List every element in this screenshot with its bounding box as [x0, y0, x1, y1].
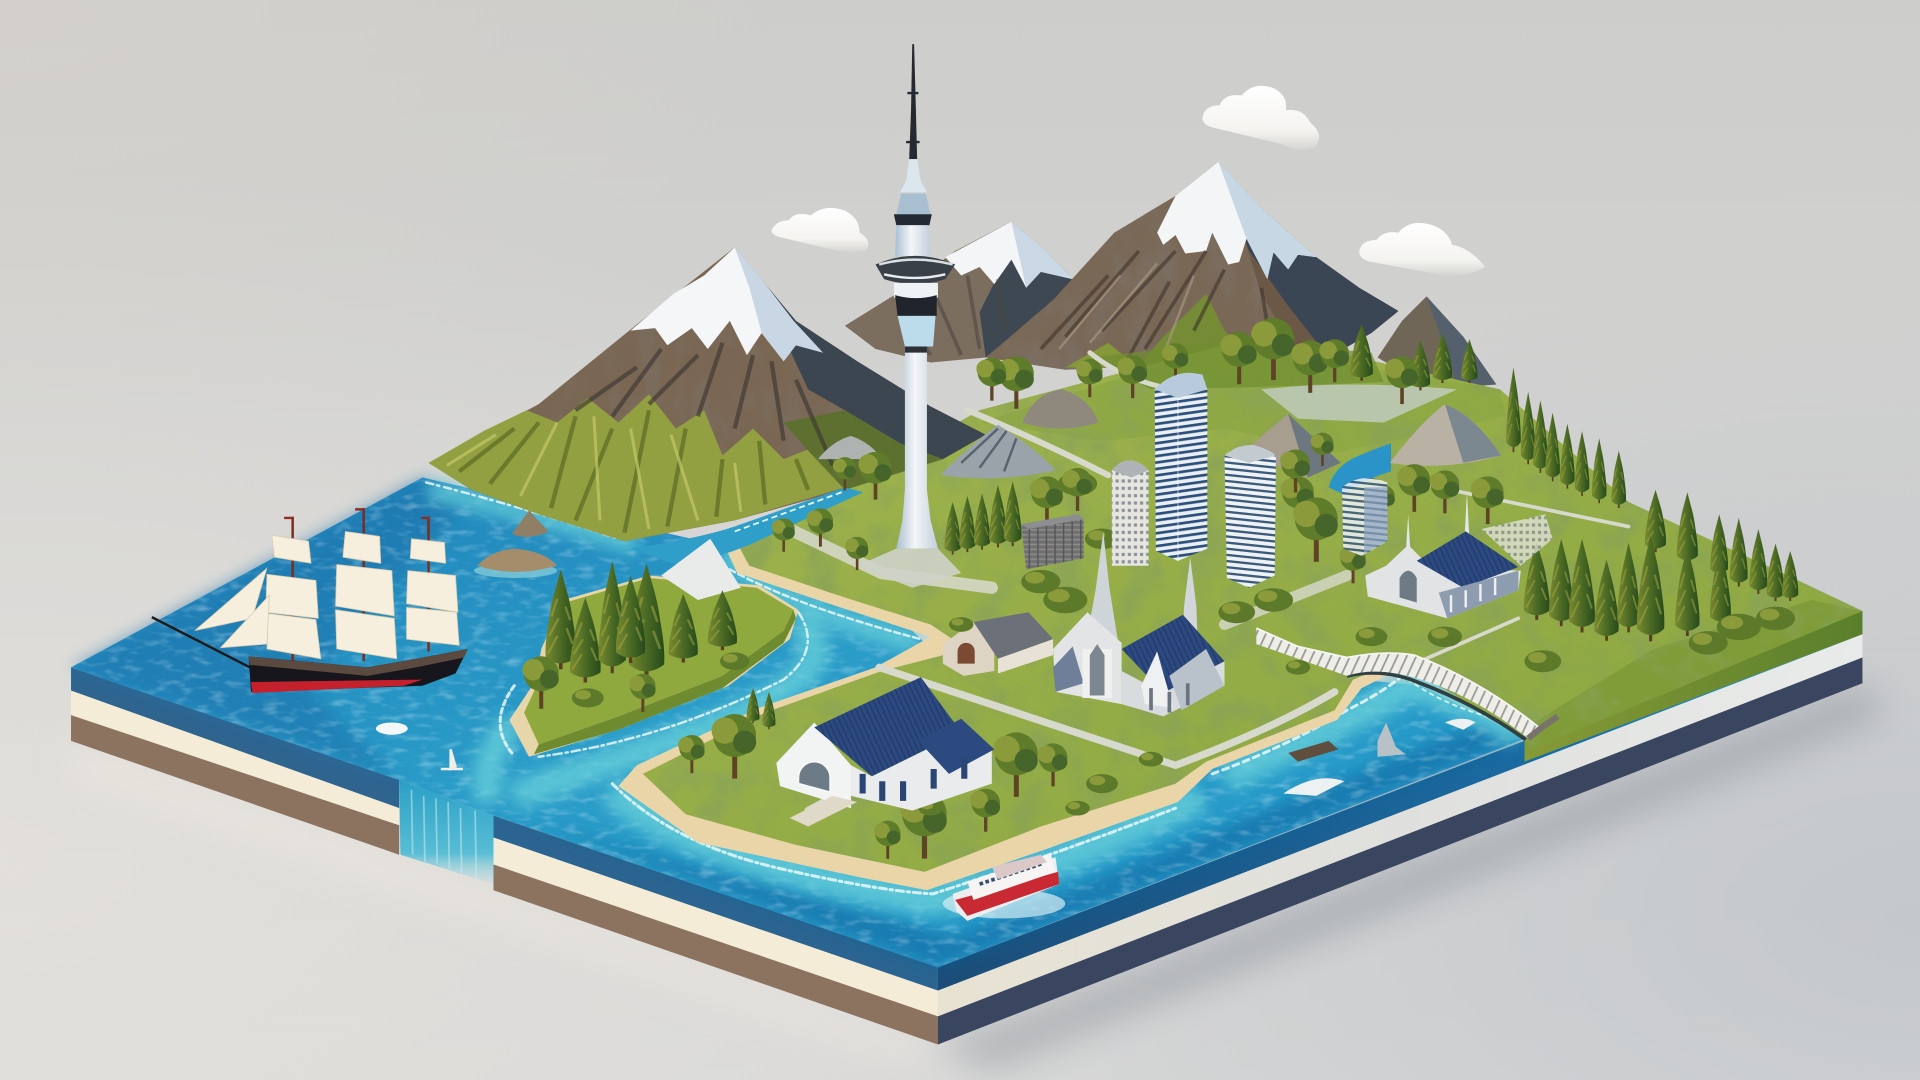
right face layers [938, 611, 1862, 1044]
river channel below mountain [631, 487, 863, 566]
white house with blue roof [776, 677, 994, 827]
sailing ship [152, 508, 468, 693]
small boats and swimmers [376, 719, 1476, 796]
cloud left [771, 208, 868, 252]
platform shadow [71, 683, 1886, 1071]
sails [195, 531, 459, 659]
hull [152, 617, 468, 693]
green land [643, 345, 1862, 872]
tower: middle striped [1224, 445, 1276, 588]
roads [784, 353, 1629, 811]
land texture [643, 345, 1862, 872]
back ridge trees [833, 318, 1504, 623]
rocks in bay [474, 511, 557, 578]
sky tower [857, 44, 961, 588]
rear peak: big snow mountain [986, 162, 1398, 373]
tower: tall striped [1155, 373, 1207, 561]
sand beaches [618, 416, 1396, 890]
foothill ground [1090, 340, 1384, 389]
cloud top right [1202, 86, 1319, 150]
rear peak: small right mountain [1378, 296, 1496, 389]
dark office block [1021, 514, 1084, 569]
pond [1329, 443, 1391, 495]
water surface [71, 478, 1526, 967]
left snow mountain [429, 247, 986, 541]
rear peak: middle snow mountain [845, 222, 1075, 362]
platform layered sides [71, 611, 1862, 1044]
small barn [943, 612, 1053, 676]
waterfall [399, 780, 493, 884]
cloud right [1359, 223, 1485, 276]
foam lines [426, 482, 1512, 894]
ferry [943, 853, 1065, 921]
central church [1053, 531, 1224, 716]
tower: left block [1112, 460, 1149, 566]
masts [284, 508, 430, 661]
shoreline turquoise [429, 490, 1518, 900]
bridge [1256, 628, 1558, 740]
left face layers [71, 667, 938, 1044]
small grey hills [818, 389, 1501, 480]
house island trees and scenery [678, 537, 1561, 859]
tower: right block [1342, 478, 1387, 556]
city conifers near tower [772, 468, 1092, 554]
right cathedral [1365, 492, 1553, 618]
forest: right conifers [1506, 367, 1798, 655]
mainland and house peninsula [618, 340, 1862, 890]
tree island [509, 539, 798, 757]
tower blocks [1112, 373, 1387, 588]
